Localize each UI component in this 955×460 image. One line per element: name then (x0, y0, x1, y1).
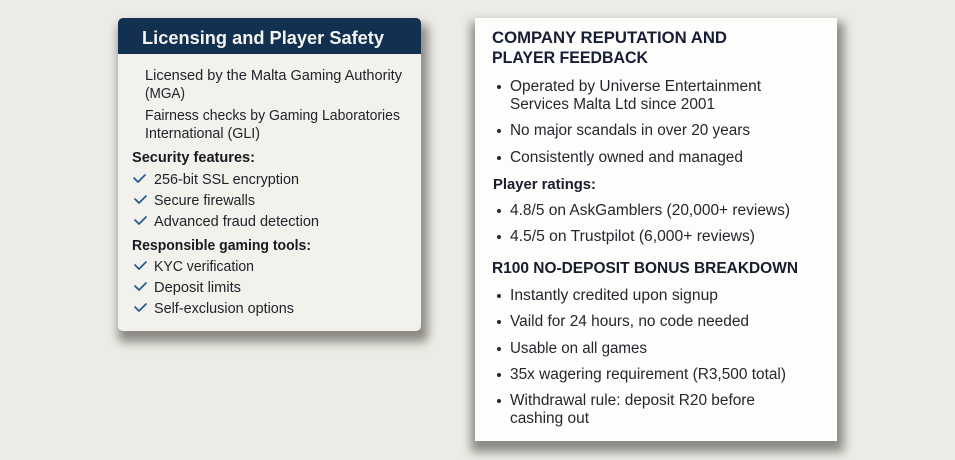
checklist: security features (134, 171, 319, 230)
heading: R100 no-deposit bonus breakdown: R100 NO-DEPOSIT BONUS BREAKDOWN (492, 260, 798, 277)
checklist: responsible gaming tools: Self-exclusion options (154, 300, 294, 317)
text block: licensing authority: Licensed by the Malta Gaming Authority (145, 67, 402, 84)
heading: player ratings: Player ratings: (493, 176, 596, 193)
panel: licensing and player safety (118, 18, 428, 342)
bullet list: bonus terms: Instantly credited upon signup (510, 287, 718, 304)
checklist: security features: Secure firewalls (154, 192, 255, 209)
bullet list: company facts: No major scandals in over 20 years (510, 122, 750, 139)
checklist: security features: 256-bit SSL encryption (154, 171, 299, 188)
checklist: security features: Advanced fraud detection (154, 213, 319, 230)
bullet list: bonus terms: cashing out (510, 410, 590, 427)
bullet list: player ratings: 4.5/5 on Trustpilot (6,000+ reviews) (510, 228, 755, 245)
bullet list: bonus terms: Withdrawal rule: deposit R20 before (510, 392, 755, 409)
bullet list: bonus terms: Vaild for 24 hours, no code needed (510, 313, 749, 330)
bullet list: bonus terms (497, 287, 786, 427)
checklist: responsible gaming tools (135, 258, 294, 317)
bullet list: company facts: Operated by Universe Entertainment (510, 78, 762, 95)
text block: licensing authority: (MGA) (145, 85, 185, 102)
heading: company reputation and player feedback: COMPANY REPUTATION AND (492, 28, 727, 47)
bullet list: bonus terms: Usable on all games (510, 340, 647, 357)
checklist: responsible gaming tools: Deposit limits (154, 279, 241, 296)
bullet list: company facts: Services Malta Ltd since 2001 (510, 96, 715, 113)
checklist: responsible gaming tools: KYC verification (154, 258, 254, 275)
heading: security features: Security features: (132, 149, 255, 166)
heading: company reputation and player feedback: PLAYER FEEDBACK (492, 48, 649, 67)
bullet list: company facts: Consistently owned and managed (510, 149, 743, 166)
text block: fairness checks: Fairness checks by Gaming Laboratories (145, 107, 400, 124)
panel header: licensing and player safety (118, 18, 421, 54)
heading: responsible gaming tools: Responsible gaming tools: (132, 237, 311, 254)
panel header: licensing and player safety: Licensing and Player Safety (142, 27, 385, 48)
bullet list: company facts (497, 78, 762, 166)
bullet list: bonus terms: 35x wagering requirement (R3,500 total) (510, 366, 786, 383)
text block: fairness checks: International (GLI) (145, 125, 260, 142)
bullet list: player ratings: 4.8/5 on AskGamblers (20,000+ reviews) (510, 202, 790, 219)
bullet list: player ratings (497, 202, 790, 245)
panel: company reputation and bonus breakdown (471, 18, 844, 452)
